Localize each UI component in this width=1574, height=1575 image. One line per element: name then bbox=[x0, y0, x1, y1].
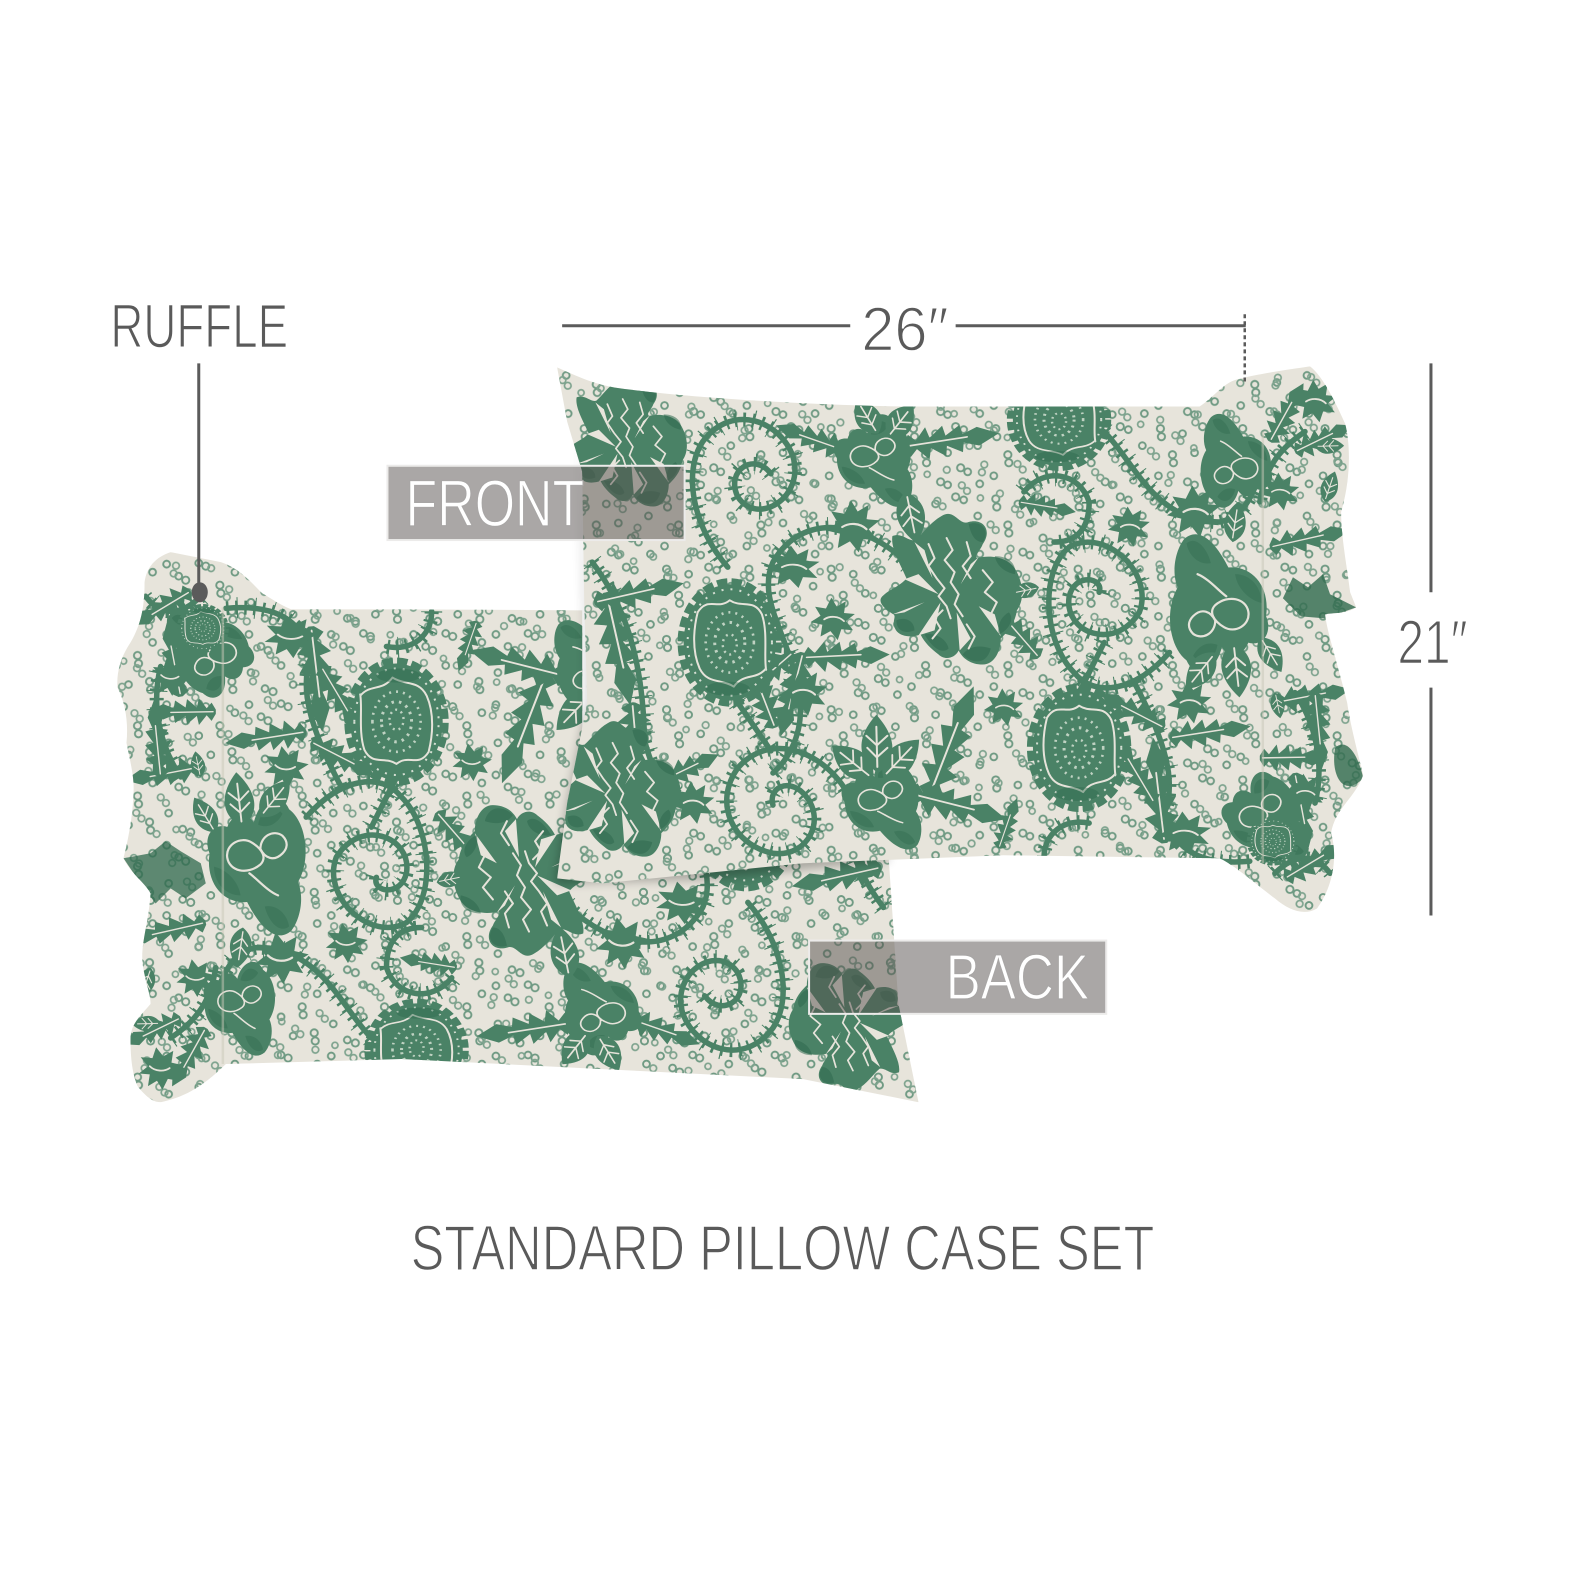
label panel: BACK bbox=[809, 941, 1106, 1014]
height dimension: 21 inches: 21″ bbox=[1397, 609, 1468, 678]
infographic canvas bbox=[114, 305, 1466, 1270]
front pillow shadow bbox=[555, 402, 888, 883]
ruffle pointer line with dot bbox=[192, 363, 208, 602]
front pillow case with ruffle bbox=[557, 366, 1363, 912]
back pillow case with ruffle bbox=[117, 552, 918, 1102]
label panel: FRONT: FRONT bbox=[406, 467, 584, 541]
title: product name: STANDARD PILLOW CASE SET bbox=[411, 1212, 1154, 1284]
label panel: BACK: BACK bbox=[946, 941, 1089, 1013]
label: RUFFLE: RUFFLE bbox=[110, 292, 288, 361]
width dimension: 26 inches: 26″ bbox=[861, 295, 949, 364]
